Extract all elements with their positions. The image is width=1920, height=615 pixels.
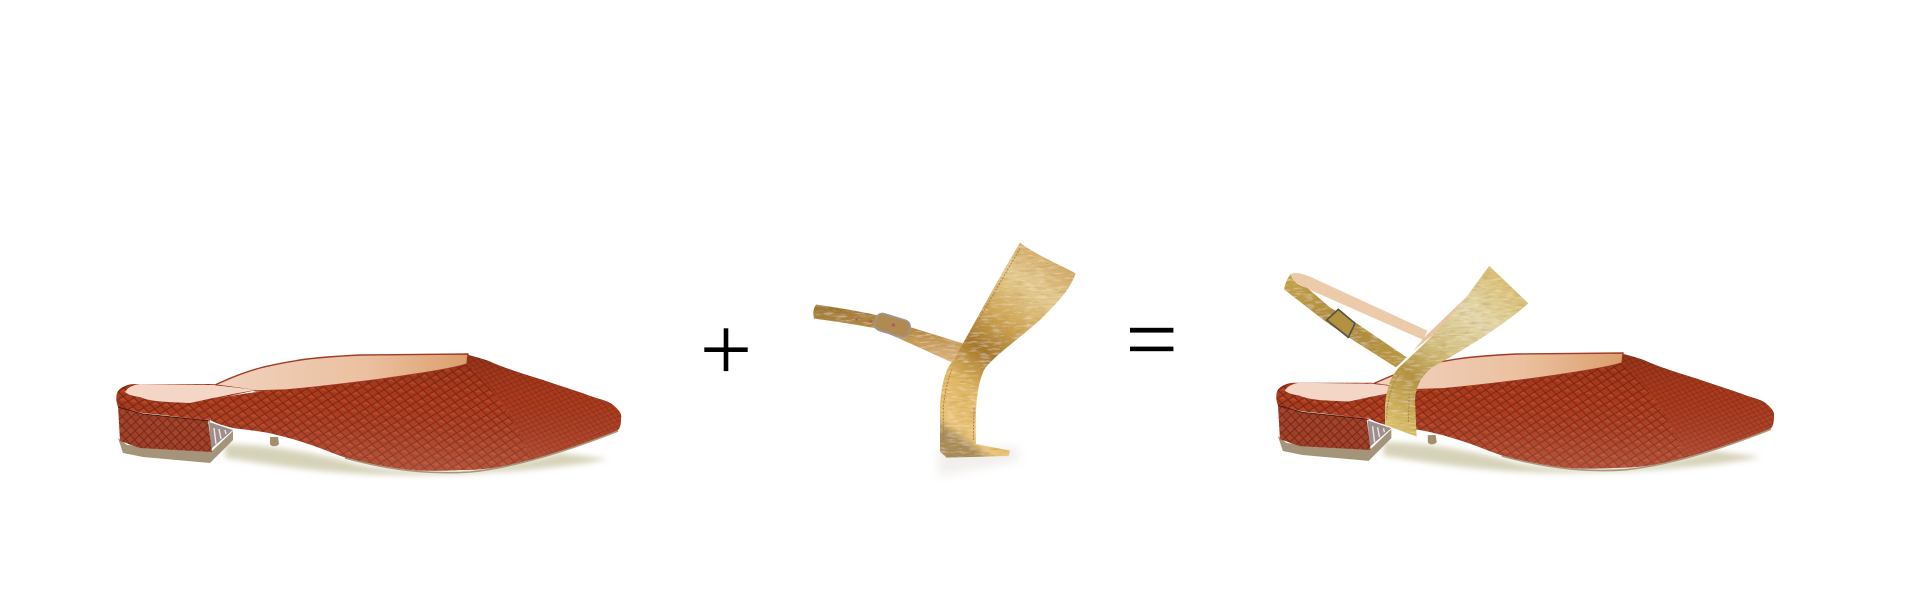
band stitching (943, 248, 1020, 440)
heel seam (118, 407, 210, 421)
ground shadow (225, 444, 608, 475)
buckle (1327, 309, 1355, 337)
band stitching (1387, 375, 1409, 423)
sling strap with buckle (813, 243, 1076, 477)
buckle (855, 312, 912, 339)
heel seat insole (125, 384, 257, 403)
inner heel face (209, 422, 233, 449)
vamp shading (163, 355, 621, 471)
wide gold band (1385, 266, 1528, 437)
strap back lining (1290, 273, 1467, 351)
buckle pin (270, 437, 279, 446)
inner lining (215, 354, 468, 391)
toe fine scales (467, 355, 621, 458)
mule body (1276, 353, 1774, 473)
soft shadow (937, 447, 1020, 477)
plus sign (704, 328, 748, 371)
thin ankle strap (1284, 274, 1407, 367)
heel block (118, 406, 212, 452)
shoe: red snakeskin mule (116, 354, 621, 475)
shoe: mule with gold strap attached (1276, 266, 1774, 473)
wide gold band (940, 243, 1076, 458)
thin ankle strap (813, 305, 963, 364)
vamp upper (163, 355, 621, 471)
heel seat rim (116, 384, 257, 415)
heel sole (118, 431, 233, 463)
equals sign (1130, 328, 1173, 351)
sole edge (345, 431, 618, 473)
